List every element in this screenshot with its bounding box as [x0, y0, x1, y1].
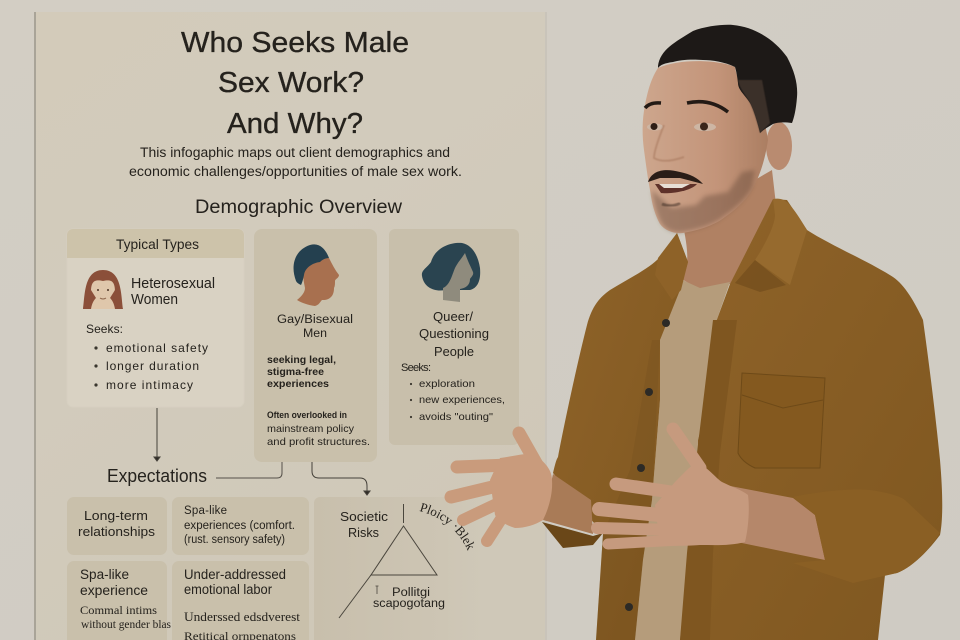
list: seeks: more intimacy: [106, 378, 193, 392]
text: often overlooked: mainstream policy: [267, 423, 355, 435]
eyebrows: [645, 102, 728, 112]
label: societic risks: Societic: [340, 509, 389, 524]
t-shirt: [635, 278, 730, 640]
label: gay/bisexual men: [277, 314, 353, 340]
label: societic risks: Risks: [348, 525, 379, 540]
pocket: [738, 373, 825, 468]
title: [181, 27, 409, 140]
text: often overlooked: Often overlooked in: [267, 410, 347, 421]
card: spa-like experience: without gender blas: [81, 617, 171, 631]
card: spa-like experience: Commal intims: [80, 603, 157, 617]
list: seeks: avoids "outing": [419, 411, 493, 423]
placket: [680, 320, 737, 640]
text: seeking legal: seeking legal,: [267, 354, 336, 366]
icon: man profile: [294, 244, 339, 306]
diagram: risk triangle: [339, 504, 437, 618]
stubble: [652, 170, 755, 232]
neck: [680, 170, 778, 290]
card: under-addressed emotional labor: [172, 561, 309, 640]
face: [643, 61, 768, 233]
subtitle: [129, 145, 462, 179]
panel: typical types: [67, 229, 244, 407]
panel: queer/questioning people: [389, 229, 519, 445]
label: heterosexual women: Heterosexual: [131, 276, 215, 292]
text: seeking legal: [267, 354, 336, 390]
nose shadow: [654, 125, 684, 161]
card: spa-like experience: Spa-like: [80, 567, 129, 582]
collar: [755, 199, 807, 285]
icon: queer profile: [422, 243, 480, 302]
card: long-term relationships: [67, 497, 167, 555]
subtitle: This infogaphic maps out client demographics and: [140, 145, 450, 160]
label: political scapegoating: Pollitgi: [392, 587, 430, 599]
label: heterosexual women: [131, 276, 215, 308]
section heading: demographic overview: Demographic Overview: [195, 197, 402, 218]
hair: [658, 25, 797, 133]
card: spa-like experiences: Spa-like: [184, 505, 227, 517]
list: seeks: Seeks:: [401, 362, 431, 374]
poster: [34, 12, 547, 640]
card: spa-like experiences: experiences (comfort.: [184, 520, 295, 532]
label: queer/questioning people: Questioning: [419, 327, 489, 341]
panel: societic risks: [314, 497, 474, 640]
left shirt shadow: [596, 340, 660, 640]
card: under-addressed emotional labor: Underssed edsdverest: [184, 610, 301, 624]
card: long-term relationships: relationships: [78, 524, 156, 539]
goatee: [662, 203, 680, 206]
curved label: policy: Ploicy ·Blek: [420, 502, 474, 551]
forearm and hand: left: [451, 433, 603, 548]
eyes: [647, 122, 716, 131]
list: seeks: Seeks:: [86, 322, 123, 336]
shirt: [553, 199, 942, 640]
label: gay/bisexual men: Gay/Bisexual: [277, 314, 353, 326]
mouth: [655, 184, 697, 193]
title: Who Seeks Male: [181, 27, 409, 59]
rolled cuff: [793, 489, 940, 583]
list: seeks: new experiences,: [419, 394, 505, 406]
forearm and hand: right: [597, 429, 940, 583]
heading: expectations: Expectations: [107, 466, 207, 486]
label: queer/questioning people: People: [434, 345, 474, 359]
label: queer/questioning people: Queer/: [433, 310, 474, 324]
head: [643, 25, 797, 233]
text: seeking legal: experiences: [267, 378, 329, 390]
presenter: [451, 25, 942, 640]
title: And Why?: [227, 108, 363, 140]
label: heterosexual women: Women: [131, 292, 178, 308]
ear: [766, 122, 792, 170]
label: political scapegoating: [373, 587, 445, 610]
list: seeks: longer duration: [106, 359, 199, 373]
list: seeks: emotional safety: [106, 341, 208, 355]
label: queer/questioning people: [419, 310, 489, 359]
card: under-addressed emotional labor: Under-addressed: [184, 567, 286, 582]
card: spa-like experience: [67, 561, 171, 640]
panel: gay/bisexual men: [254, 229, 377, 462]
text: often overlooked: and profit structures.: [267, 436, 370, 448]
title: Sex Work?: [218, 67, 364, 99]
list: seeks: [401, 362, 505, 423]
card: spa-like experiences: (rust. sensory safety): [184, 534, 285, 546]
icon: woman avatar: [83, 270, 123, 309]
moustache: [648, 170, 703, 184]
panel: typical types: Typical Types: [116, 236, 199, 252]
card: spa-like experiences: [172, 497, 309, 555]
list: seeks: exploration: [419, 378, 475, 390]
buttons: [625, 319, 670, 611]
card: long-term relationships: Long-term: [84, 508, 148, 523]
label: societic risks: [340, 509, 389, 540]
subtitle: economic challenges/opportunities of male sex work.: [129, 164, 462, 179]
arrow: types to expectations: [154, 408, 160, 461]
arrow: connector to societic risks: [312, 462, 370, 495]
card: spa-like experience: experience: [80, 583, 148, 598]
text: often overlooked: [267, 410, 370, 448]
list: seeks: [86, 322, 208, 392]
card: under-addressed emotional labor: emotional labor: [184, 582, 272, 597]
arrow: connector to expectations: [216, 462, 282, 478]
text: seeking legal: stigma-free: [267, 366, 324, 378]
label: political scapegoating: scapogotang: [373, 598, 445, 610]
label: gay/bisexual men: Men: [303, 328, 327, 340]
